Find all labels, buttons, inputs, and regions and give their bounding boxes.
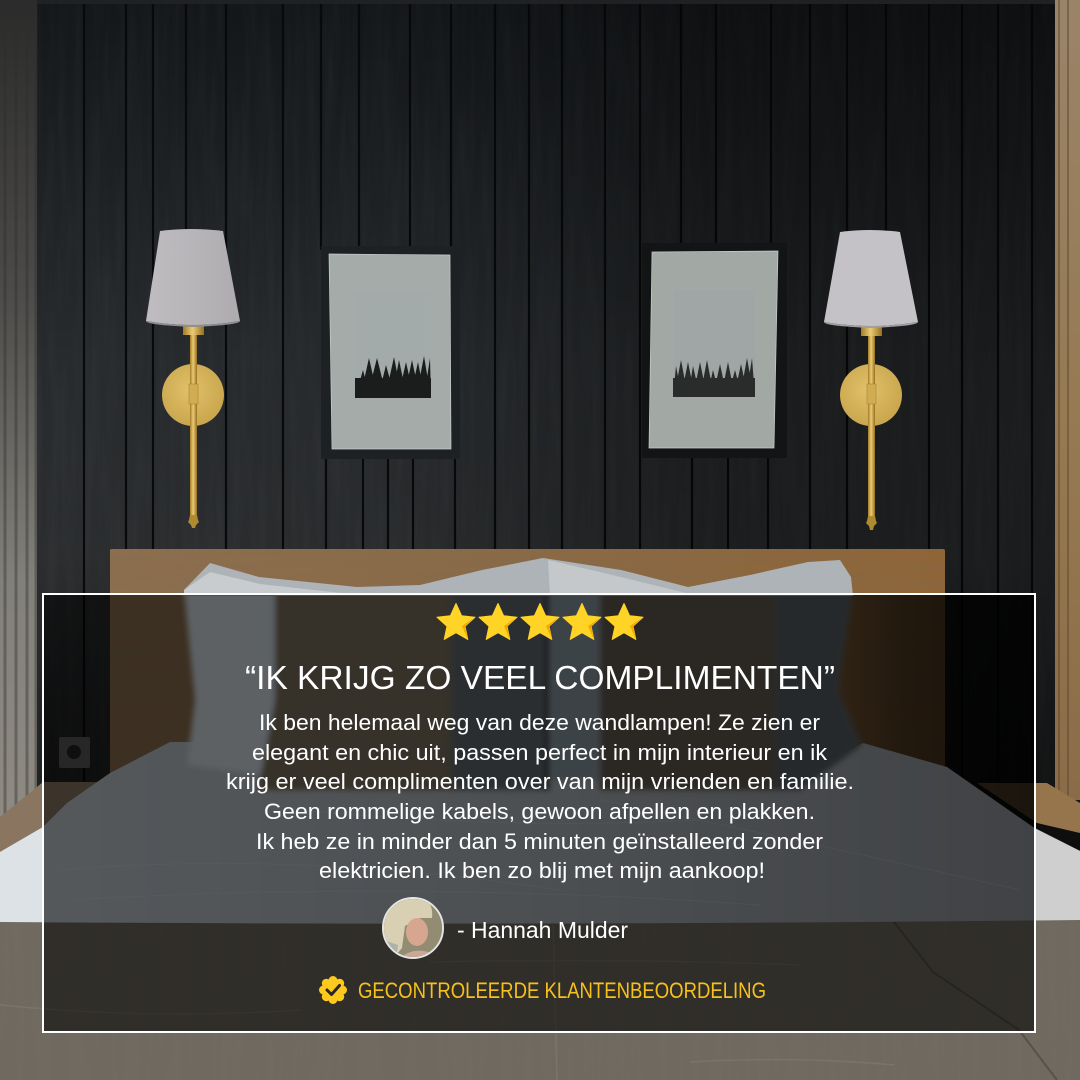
headboard [110, 549, 945, 789]
icon: verified badge [319, 976, 347, 1004]
pillows: lower part inside panel [184, 590, 862, 790]
rating: five stars [437, 604, 643, 639]
text: verified review label: GECONTROLEERDE KLANTENBEOORDELING [358, 978, 766, 1003]
shading on dark right of panel [775, 594, 1036, 834]
text block: review body [226, 710, 854, 883]
text block: review body: krijg er veel complimenten over van mijn vrienden en familie. [226, 769, 854, 794]
bed: duvet [0, 742, 1080, 940]
text: reviewer name: - Hannah Mulder [457, 917, 628, 943]
nightstand: left [0, 782, 110, 856]
wood column: right side [1055, 0, 1080, 800]
bed: throw blanket at foot [0, 920, 1080, 1080]
framed print: left [321, 246, 460, 459]
text block: review body: Ik heb ze in minder dan 5 minuten geïnstalleerd zonder [256, 829, 823, 854]
text block: review body: Geen rommelige kabels, gewoon afpellen en plakken. [264, 799, 815, 824]
wall lamp: right [824, 230, 918, 530]
wall: dark vertical wood planks [36, 0, 1060, 800]
framed print: right [642, 243, 787, 458]
pillows: crumpled top above panel [184, 558, 853, 596]
text block: review body: Ik ben helemaal weg van deze wandlampen! Ze zien er [259, 710, 820, 735]
nightstand: right [977, 783, 1080, 855]
text block: review body: elektricien. Ik ben zo blij met mijn aankoop! [319, 858, 765, 883]
panel: review overlay [43, 594, 1035, 1032]
wall lamp: left [146, 229, 240, 528]
icon: reviewer avatar [383, 897, 443, 960]
curtain: left side [0, 0, 37, 830]
heading: review title: “IK KRIJG ZO VEEL COMPLIMENTEN” [245, 659, 835, 696]
text block: review body: elegant en chic uit, passen perfect in mijn interieur en ik [252, 740, 828, 765]
socket on wall [59, 737, 90, 768]
